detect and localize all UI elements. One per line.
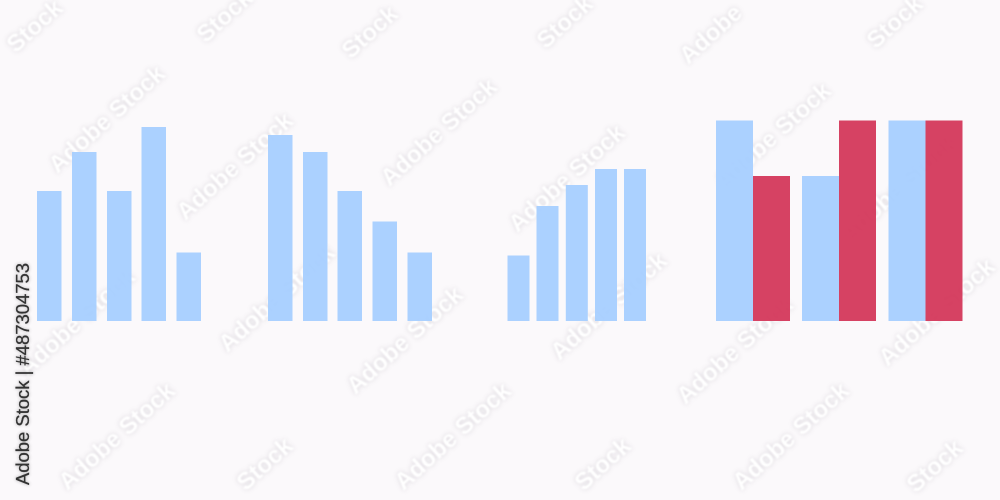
- watermark pattern: Stock: [570, 432, 637, 496]
- watermark pattern: Adobe Stock: [727, 377, 855, 496]
- watermark pattern: Adobe Stock: [375, 73, 503, 192]
- watermark pattern: Adobe Stock: [53, 377, 181, 496]
- chart: descending bars: [268, 135, 432, 321]
- watermark pattern: Adobe Stock: [341, 281, 469, 400]
- watermark pattern: Adobe Stock: [671, 291, 799, 410]
- watermark pattern: Adobe Stock: [503, 119, 631, 238]
- watermark pattern: Adobe: [674, 0, 748, 69]
- stock ID label: Adobe Stock | #487304753: [13, 263, 33, 485]
- chart: mixed bars: [37, 127, 201, 321]
- watermark pattern: Adobe Stock: [873, 253, 1000, 372]
- watermark pattern: Adobe Stock: [43, 60, 171, 179]
- watermark pattern: Stock: [902, 434, 969, 498]
- watermark pattern: Adobe Stock: [171, 107, 299, 226]
- watermark pattern: Adobe Stock: [835, 129, 963, 248]
- watermark pattern: Adobe Stock: [389, 377, 517, 496]
- watermark pattern: Stock: [232, 432, 299, 496]
- watermark pattern: Adobe Stock: [13, 263, 141, 382]
- watermark pattern: Adobe Stock: [709, 77, 837, 196]
- watermark pattern: Stock: [337, 0, 404, 64]
- watermark pattern: Adobe Stock: [213, 239, 341, 358]
- chart: ascending bars: [508, 169, 646, 321]
- chart: paired blue and red bars: [716, 120, 962, 321]
- watermark pattern: Adobe Stock: [545, 247, 673, 366]
